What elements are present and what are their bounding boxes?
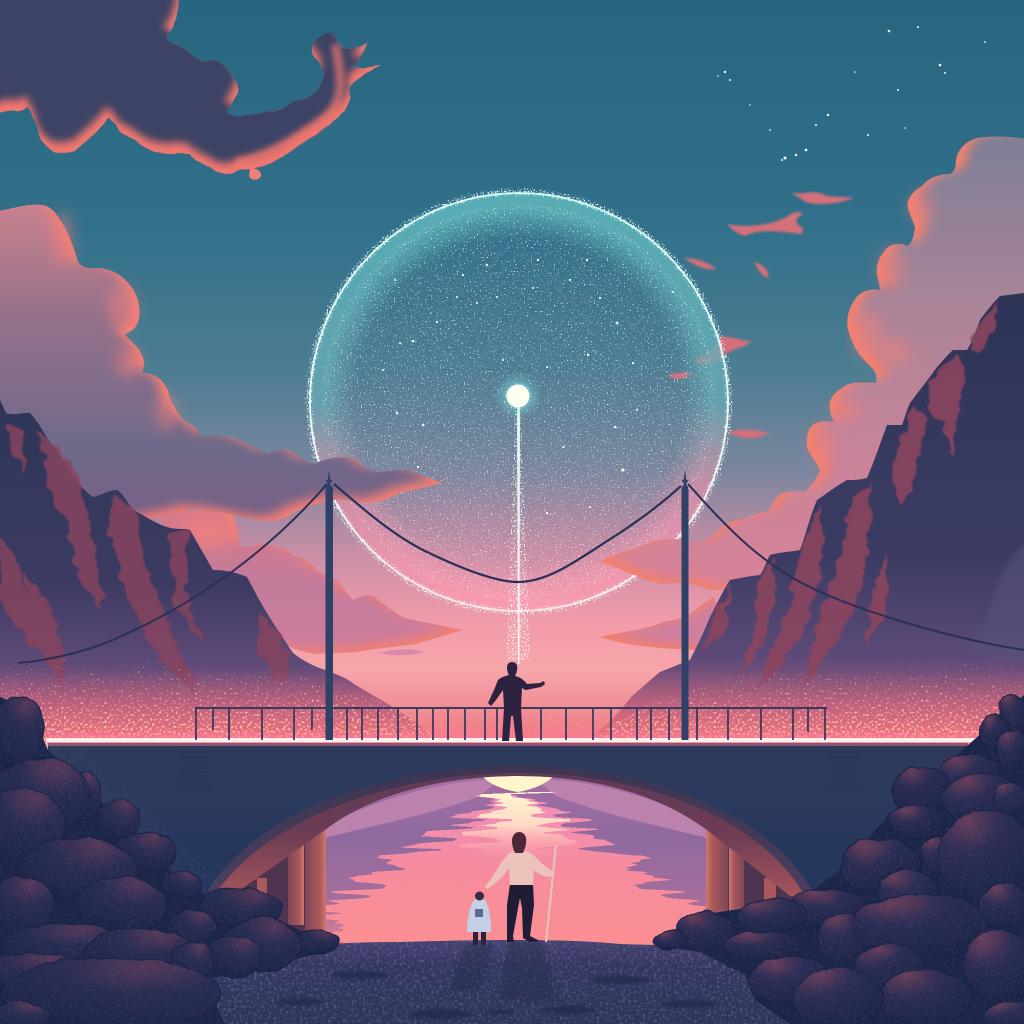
sun glow at horizon — [482, 776, 554, 792]
tower: left — [326, 470, 333, 740]
shirt and arms — [485, 851, 554, 889]
cloud lobe: bright coral stem — [182, 516, 234, 548]
ring disc halo — [310, 193, 728, 611]
cloud: faint streak near horizon — [380, 649, 424, 655]
stars: upper right sky — [717, 26, 986, 161]
water — [320, 775, 712, 950]
cloud: large right bank — [600, 136, 1024, 590]
figure: child — [467, 892, 491, 945]
bridge pillars — [257, 830, 776, 938]
sun shine on water — [480, 792, 556, 860]
figure: adult by the water — [485, 832, 556, 942]
tower: right — [682, 470, 688, 740]
rock face: lighter far right — [966, 540, 1024, 665]
rock base: left — [0, 697, 335, 1024]
rocks: left pile — [0, 694, 340, 1024]
bridge arch rim — [207, 766, 816, 898]
ridge highlights: right — [704, 298, 998, 690]
ring twinkle dashes — [310, 193, 728, 611]
cloud: lower left over the valley — [156, 511, 464, 654]
reflection — [320, 795, 712, 950]
cloud lobes: lit coral bumps — [812, 192, 934, 463]
cloud: coral glow along upper left tail — [240, 48, 340, 162]
particles: glittering dust over the valley — [0, 640, 1024, 742]
cable: right span — [688, 484, 1024, 650]
ridge highlights: left — [0, 422, 290, 695]
bright stars inside the ring — [382, 259, 674, 514]
cloud: small wisps on the right — [668, 192, 853, 438]
ground shadows and bumps — [276, 942, 718, 1019]
ring of light — [309, 192, 729, 612]
under-arch scene — [320, 775, 712, 950]
cable: center span — [334, 484, 681, 582]
mountains: right range — [590, 293, 1024, 738]
cloud: upper left — [0, 0, 379, 174]
rocks: right pile — [652, 694, 1024, 1024]
deck edge — [48, 743, 968, 746]
stars inside the ring — [321, 204, 717, 600]
ring core line — [310, 193, 728, 611]
pillars: left — [257, 830, 326, 938]
cloud lobes: lit coral bumps — [52, 212, 176, 430]
railing — [195, 707, 827, 740]
rock base: right — [655, 695, 1024, 1024]
mountains: left range — [0, 400, 436, 738]
pillars: right — [706, 830, 776, 914]
arch backing: shadowed underside — [207, 766, 816, 945]
glowing sun — [494, 372, 542, 420]
head — [512, 832, 526, 853]
bridge body — [48, 745, 968, 900]
legs — [507, 884, 540, 942]
bridge vents — [175, 752, 862, 790]
figure: man on the bridge — [488, 662, 545, 741]
cable: left span — [18, 484, 327, 663]
cloud: small right lower — [600, 597, 730, 650]
bridge towers — [326, 470, 688, 740]
light strip on deck — [46, 733, 980, 745]
glow: low haze behind railing — [0, 670, 1024, 742]
rock texture — [0, 700, 1024, 1024]
staff — [546, 845, 556, 942]
ground: sandy riverbank — [180, 940, 860, 1024]
cloud: large left bank — [0, 205, 442, 560]
cloud: small fragment under upper left cloud — [249, 169, 261, 180]
distant banks — [325, 779, 500, 838]
ring sparkle band — [309, 192, 729, 612]
beam of light — [506, 404, 530, 664]
